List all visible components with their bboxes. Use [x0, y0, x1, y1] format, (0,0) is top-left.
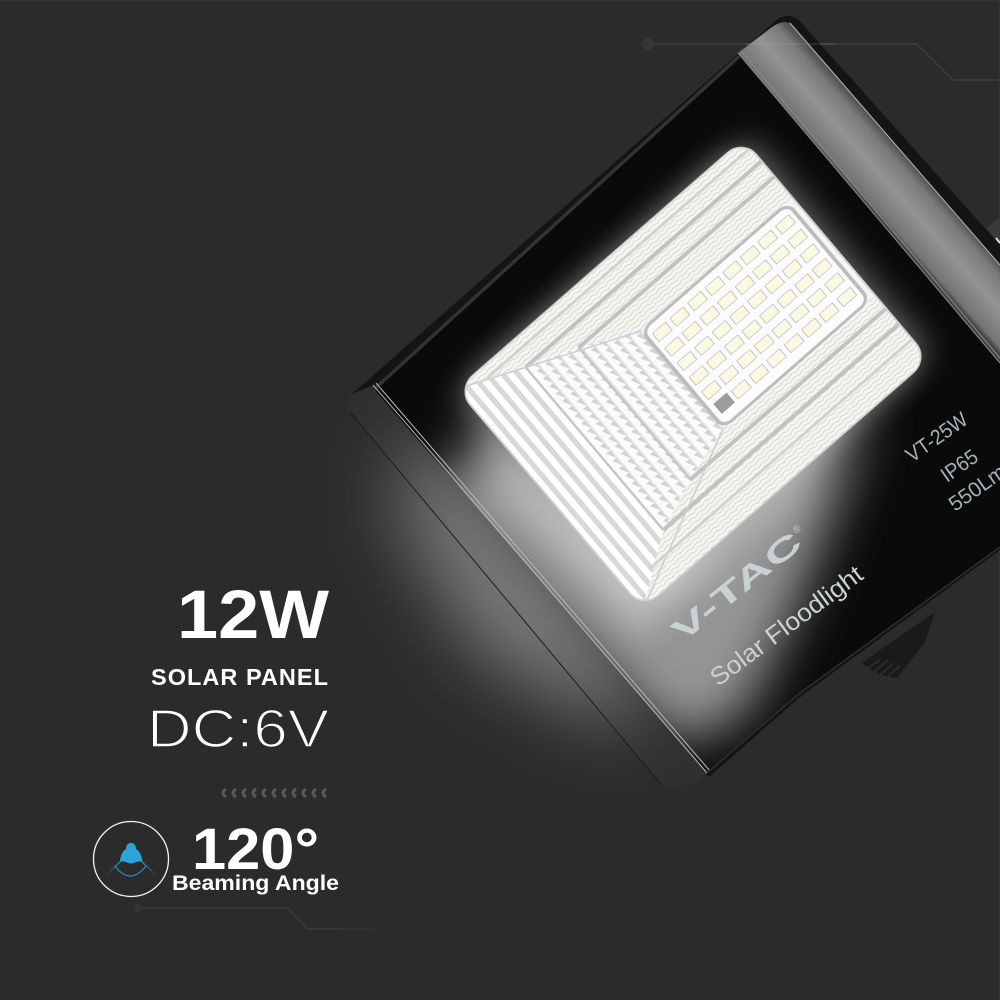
housing rim	[347, 16, 1000, 777]
mounting screw	[862, 612, 935, 678]
icon: beam angle	[94, 822, 168, 896]
lens halo	[457, 139, 929, 609]
spec label: VT-25W: VT-25W	[902, 408, 972, 467]
faint line across band	[745, 43, 835, 45]
wattage heading: 12W	[177, 576, 330, 653]
V-TAC logo printed on panel: V-TAC	[666, 526, 808, 648]
solar panel label: SOLAR PANEL	[151, 664, 328, 690]
lens outline	[457, 139, 929, 609]
front frame: lower band	[347, 385, 707, 792]
spec label: IP65: IP65	[937, 445, 983, 487]
middle stepped prisms	[528, 348, 690, 527]
circuit line: top right	[642, 38, 1000, 80]
inner stepped prisms	[581, 332, 722, 478]
beam angle label: Beaming Angle	[172, 871, 339, 895]
band outer edge line	[350, 412, 663, 787]
step outlines: horizontal	[526, 161, 899, 530]
black front panel with light glow	[373, 55, 1000, 762]
outer ridges: left side	[466, 368, 663, 600]
outer bands	[487, 148, 912, 569]
circuit line: bottom left	[134, 904, 392, 929]
sensor chip	[713, 392, 735, 414]
Solar Floodlight label: Solar Floodlight	[705, 560, 869, 692]
voltage text: DC:6V	[147, 699, 329, 759]
V-TAC logo printed on panel: ®	[791, 523, 804, 536]
LED array	[652, 215, 857, 414]
bracket stub	[986, 218, 1000, 244]
rim highlight	[790, 23, 1000, 265]
top grey band	[738, 22, 1000, 363]
step outlines: vertical	[526, 348, 690, 530]
textured side bands	[457, 139, 929, 609]
double edge lines	[373, 51, 1000, 773]
corner mitres	[467, 330, 724, 600]
LED board	[642, 203, 869, 428]
beam angle value: 120°	[192, 817, 319, 882]
V-TAC logo printed on panel	[666, 523, 808, 648]
lens	[457, 139, 929, 609]
chevron divider	[223, 789, 326, 797]
floodlight product	[340, 16, 1000, 792]
cast light on frame and background	[395, 430, 650, 725]
